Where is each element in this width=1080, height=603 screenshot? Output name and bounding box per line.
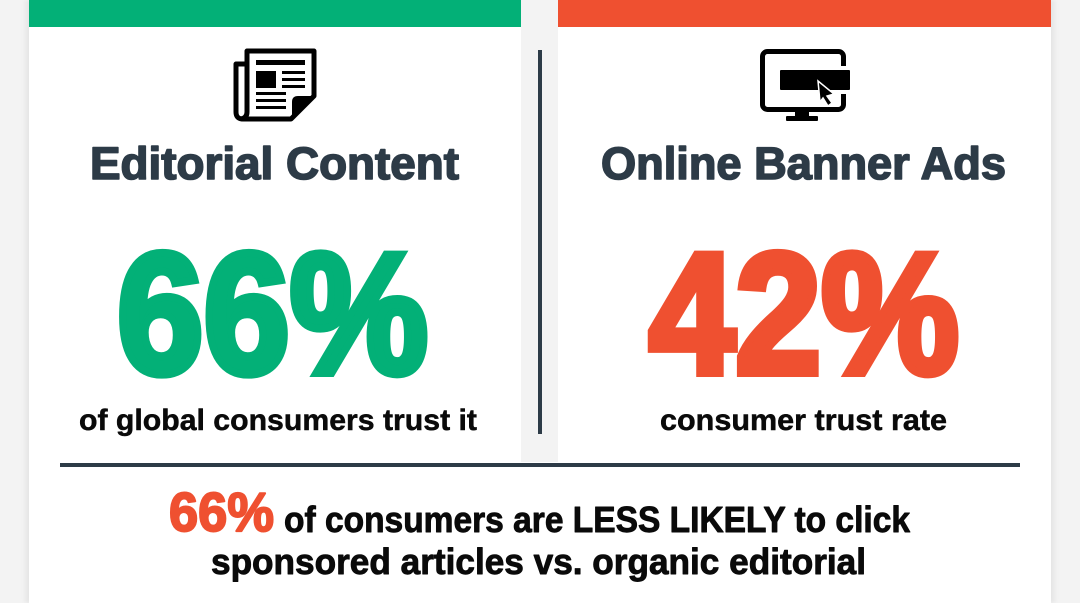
stat: 42%: 42% (649, 218, 959, 410)
vertical divider (538, 50, 542, 434)
panel: online banner ads (558, 0, 1051, 437)
caption: of global consumers trust it: of global consumers trust it (79, 404, 477, 437)
stat: 66%: 66% (117, 218, 428, 410)
caption: consumer trust rate: consumer trust rate (660, 404, 947, 437)
callout: sponsored articles statistic (169, 481, 911, 582)
callout line 1: of consumers are LESS LIKELY to click (284, 499, 911, 540)
icon: newspaper (236, 51, 315, 119)
heading: Editorial Content: Editorial Content (90, 138, 459, 189)
panel header bar: green (29, 0, 521, 27)
icon: monitor with banner and cursor (762, 52, 854, 121)
callout stat: 66%: 66% (169, 481, 274, 543)
callout line 2: sponsored articles vs. organic editorial (211, 541, 866, 582)
horizontal divider (60, 463, 1020, 467)
heading: Online Banner Ads: Online Banner Ads (601, 138, 1006, 189)
panel: editorial content (29, 0, 521, 437)
panel header bar: orange (558, 0, 1051, 27)
